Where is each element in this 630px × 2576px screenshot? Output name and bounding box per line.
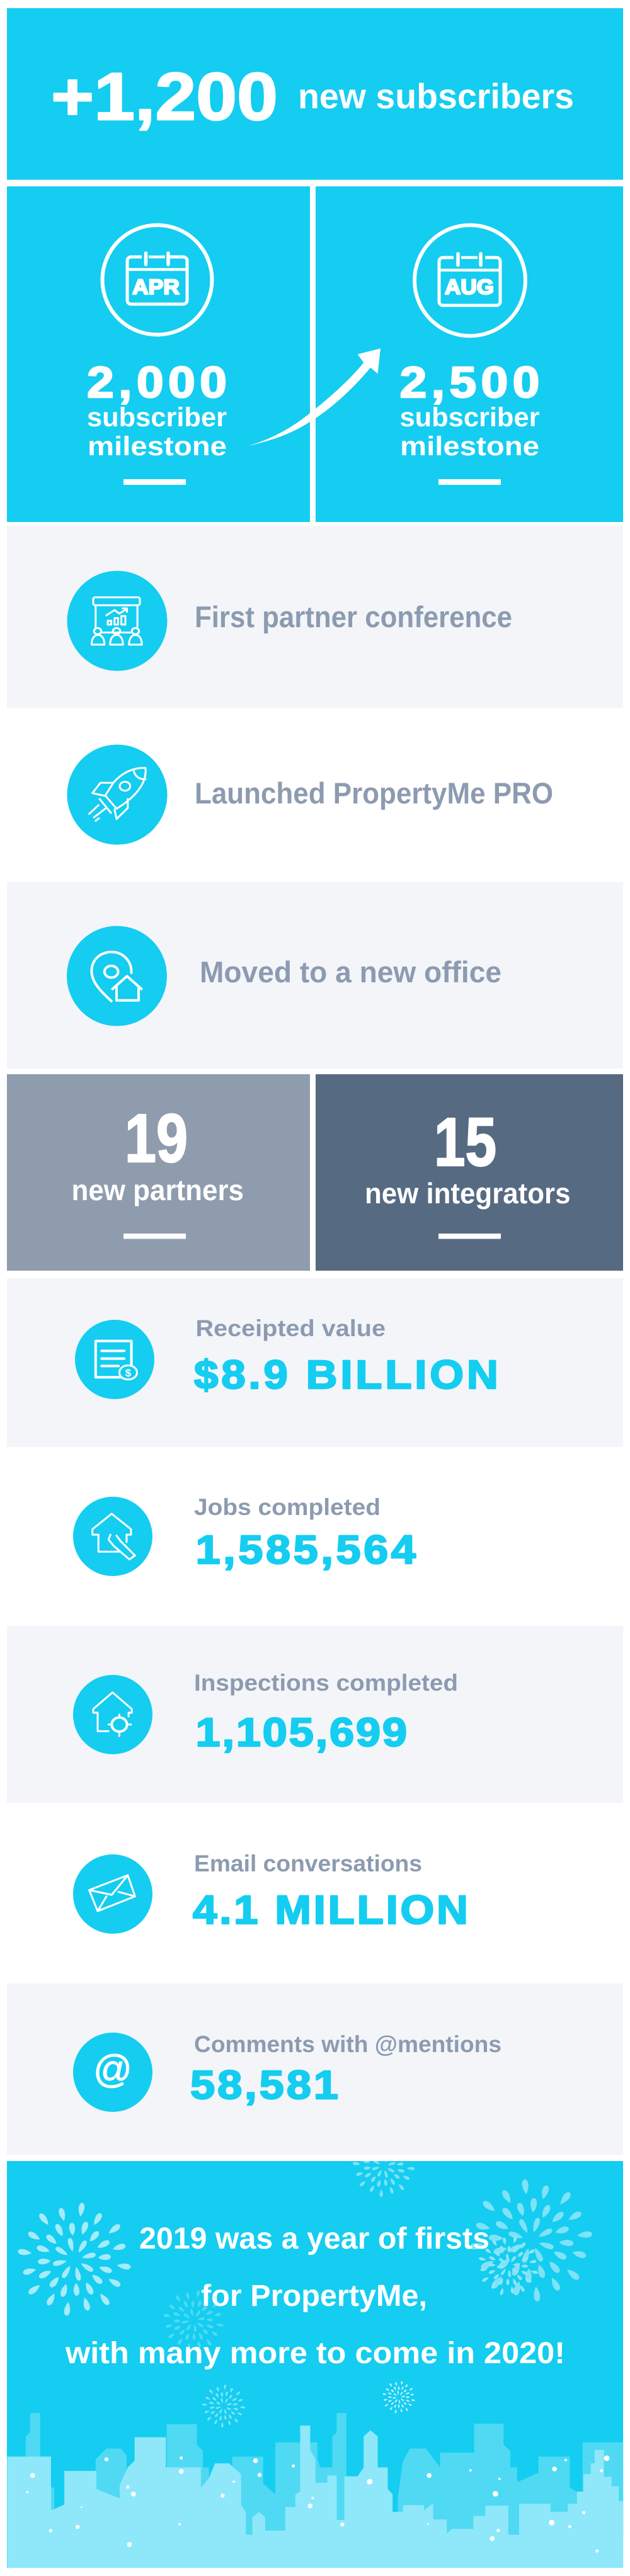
row: email conversations [73,1851,468,1934]
icon: at sign: @ [93,2048,132,2091]
icon: house with gear [73,1675,152,1754]
snow dots [26,2455,610,2553]
message line 2: for PropertyMe, [201,2279,427,2313]
panel: closing message [7,2133,623,2568]
label: new partners: new partners [72,1174,244,1206]
stat: 2,500: 2,500 [399,357,539,407]
message line 3: with many more to come in 2020! [65,2337,565,2370]
fireworks [10,2133,598,2429]
icon: house with wrench [73,1497,152,1576]
stat: 1,105,699: 1,105,699 [195,1710,407,1755]
label: milestone: milestone [88,431,227,462]
stat: 15: 15 [434,1104,496,1181]
panel: August milestone [316,186,623,522]
icon: April calendar [102,225,212,335]
panel: April milestone [7,186,310,522]
stat: 1,585,564: 1,585,564 [195,1528,416,1572]
back skyline [26,2413,623,2536]
row: jobs completed [73,1494,416,1576]
panel: new subscribers [7,8,623,180]
panel: inspections completed [7,1626,623,1803]
icon: receipt: $ [125,1367,132,1379]
row: launched PropertyMe PRO [67,744,553,845]
label: Comments with @mentions: Comments with @mentions [194,2031,501,2057]
label: Jobs completed: Jobs completed [194,1494,381,1520]
stat: 58,581: 58,581 [190,2063,338,2108]
panel: moved to a new office [7,882,623,1069]
label: milestone: milestone [400,431,539,462]
label: Inspections completed: Inspections completed [194,1670,458,1696]
icon: at sign [73,2033,152,2112]
label: Moved to a new office: Moved to a new office [200,955,501,989]
icon: location and house [67,926,167,1026]
label: Email conversations: Email conversations [194,1851,422,1876]
label: new integrators: new integrators [365,1177,571,1210]
icon: conference [67,570,168,671]
message line 1: 2019 was a year of firsts [139,2222,490,2255]
stat: $8.9 billion: $8.9 BILLION [194,1353,498,1397]
icon: August calendar: AUG [445,275,494,298]
stat: +1,200: +1,200 [51,59,278,134]
panel: new integrators [316,1074,623,1271]
icon: envelope [73,1854,152,1934]
label: First partner conference: First partner conference [195,600,512,633]
icon: receipt [75,1320,154,1399]
stat: 4.1 million: 4.1 MILLION [193,1888,468,1932]
panel: new partners [7,1074,310,1271]
arrow: growth between milestones [248,348,381,446]
illustration: city skyline [7,2413,623,2568]
stat: 2,000: 2,000 [87,357,227,407]
stat: 19: 19 [125,1100,188,1177]
label: new subscribers: new subscribers [298,76,574,116]
panel: receipted value [7,1278,623,1447]
label: Launched PropertyMe PRO: Launched PropertyMe PRO [195,776,553,810]
label: subscriber: subscriber [87,402,227,433]
icon: August calendar [415,225,525,336]
icon: April calendar: APR [132,275,180,298]
label: Receipted value: Receipted value [195,1315,386,1341]
front skyline [7,2426,623,2568]
label: subscriber: subscriber [399,402,540,433]
icon: rocket [67,744,168,845]
panel: comments with mentions [7,1983,623,2155]
panel: first partner conference [7,526,623,708]
